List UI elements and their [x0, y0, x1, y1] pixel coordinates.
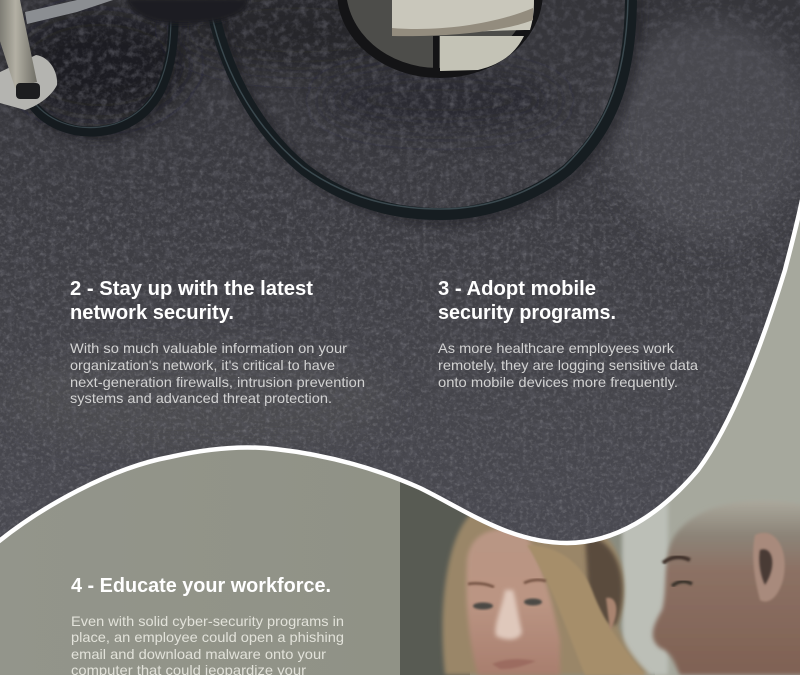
woman	[443, 510, 650, 675]
mounting plate	[0, 55, 57, 110]
heading: tip 2: network security.	[70, 302, 234, 324]
concrete flecks	[0, 58, 800, 540]
cable: short loop	[30, 15, 174, 132]
light pillar	[622, 480, 668, 675]
body: tip 4	[71, 613, 344, 675]
cable: long loop	[211, 0, 631, 214]
block: tip 2	[70, 278, 365, 406]
body: tip 4: place, an employee could open a phishing	[71, 629, 344, 645]
body: tip 3	[438, 340, 698, 390]
top fitting	[125, 0, 248, 24]
body: tip 3: onto mobile devices more frequently.	[438, 374, 678, 390]
heading: tip 4: 4 - Educate your workforce.	[71, 575, 331, 597]
heading: tip 2: 2 - Stay up with the latest	[70, 278, 313, 300]
mirror	[337, 0, 543, 78]
eyes and mouth	[473, 602, 493, 610]
body: tip 2: With so much valuable information on your	[70, 340, 347, 356]
body: tip 4: email and download malware onto your	[71, 646, 326, 662]
heading: tip 2	[70, 278, 313, 324]
block: tip 3	[438, 278, 698, 390]
horizontal pipe	[25, 0, 113, 24]
body: tip 3: remotely, they are logging sensitive data	[438, 357, 698, 373]
body: tip 2: organization's network, it's critical to have	[70, 357, 335, 373]
right wall	[655, 200, 800, 675]
body: tip 3: As more healthcare employees work	[438, 340, 675, 356]
concrete shading	[4, 0, 800, 381]
block: tip 4	[71, 575, 344, 675]
heading: tip 3: 3 - Adopt mobile	[438, 278, 596, 300]
heading: tip 3: security programs.	[438, 302, 616, 324]
vertical pipe	[0, 0, 37, 88]
heading: tip 3	[438, 278, 616, 324]
dark wall column	[400, 470, 470, 675]
cable shadows	[34, 0, 638, 220]
body: tip 4: Even with solid cyber-security programs in	[71, 613, 344, 629]
body: tip 2: systems and advanced threat protection.	[70, 390, 332, 406]
body: tip 2	[70, 340, 365, 406]
curved white divider	[0, 200, 800, 543]
man	[653, 500, 800, 675]
body: tip 2: next-generation firewalls, intrusion prevention	[70, 374, 365, 390]
pipe coupling	[16, 83, 40, 99]
